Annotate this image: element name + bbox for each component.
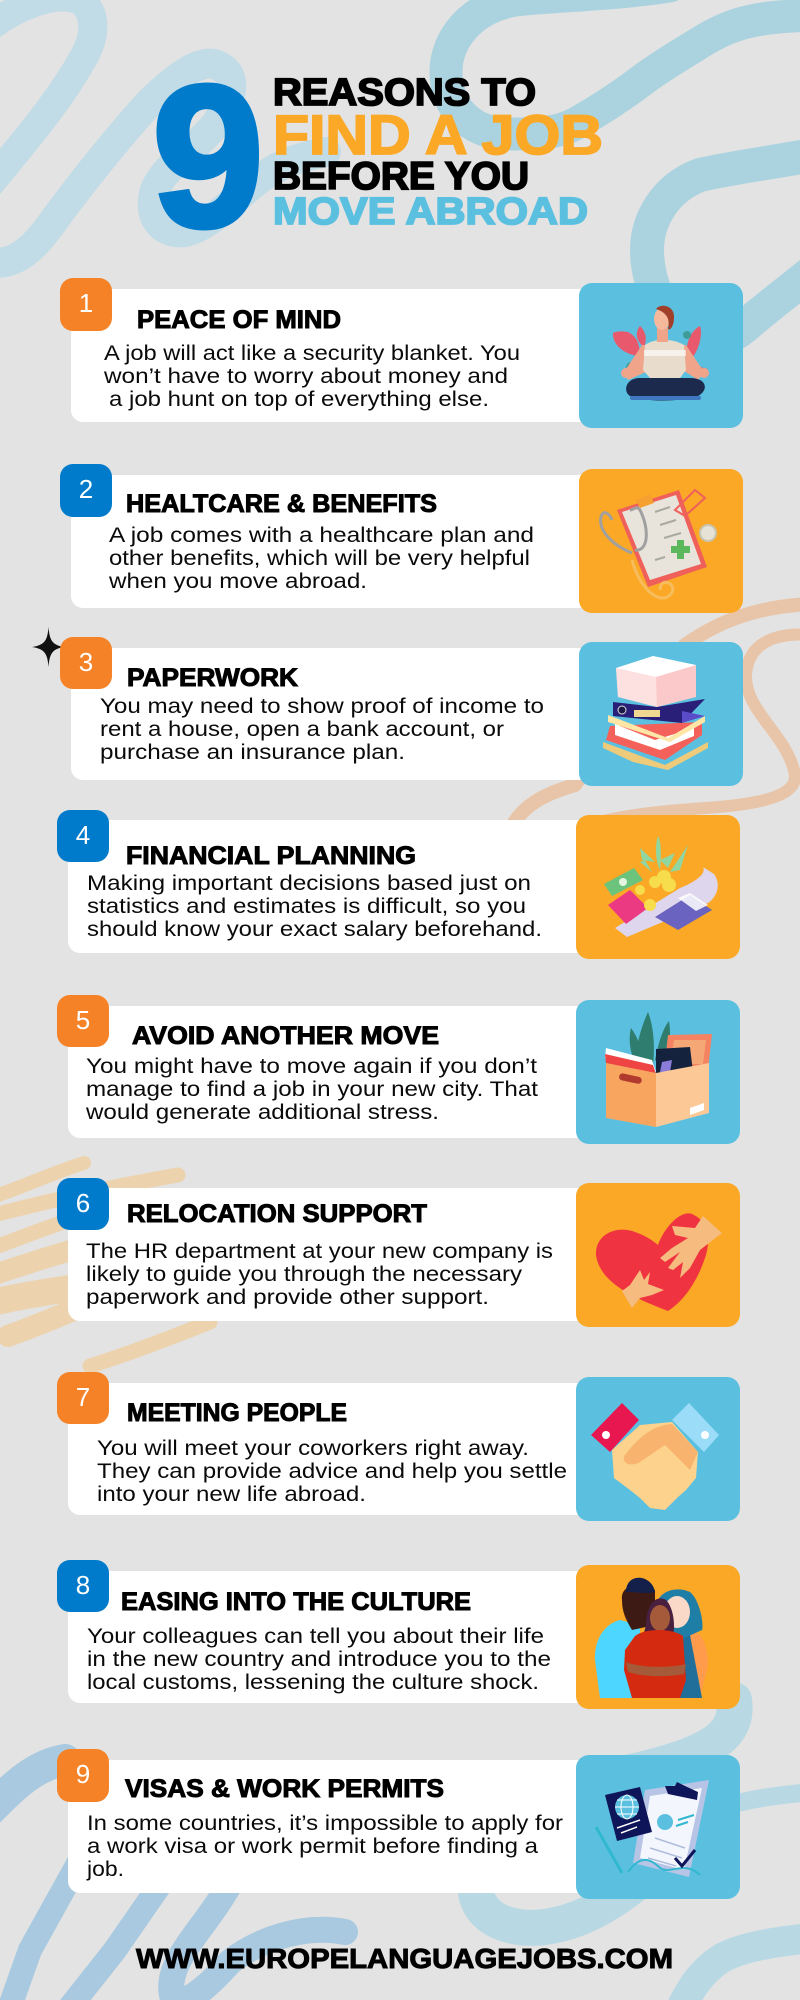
panel: reason 1 peace of mind [60,278,743,428]
badge 6: 6 [76,1188,90,1218]
badge 1 [60,278,112,331]
panel: reason 7 meeting people [57,1372,740,1521]
body text 9: job. [86,1858,124,1881]
body text 7: into your new life abroad. [97,1483,366,1506]
heading 9: VISAS & WORK PERMITS [125,1775,444,1803]
body text 8: Your colleagues can tell you about their life [87,1625,544,1648]
heading 4: FINANCIAL PLANNING [126,842,416,870]
badge 2: 2 [79,474,93,504]
body text 5: manage to find a job in your new city. That [86,1078,538,1101]
image tile 6: hands holding heart [576,1183,740,1327]
footer website url: WWW.EUROPELANGUAGEJOBS.COM [136,1943,673,1974]
body text 8: local customs, lessening the culture shock. [87,1671,539,1694]
body text 7 [97,1437,567,1506]
image tile 2: clipboard and stethoscope [579,469,743,613]
badge 2 [60,464,112,517]
badge 4 [57,810,109,862]
body text 4: statistics and estimates is difficult, so you [87,895,526,918]
badge 7: 7 [76,1382,90,1412]
body text 6 [86,1240,553,1309]
image tile 4: money and calculator [576,815,740,959]
body text 6: likely to guide you through the necessary [86,1263,523,1286]
body text 7: They can provide advice and help you settle [97,1460,567,1483]
body text 3: You may need to show proof of income to [100,695,544,718]
heading 5: AVOID ANOTHER MOVE [132,1022,439,1050]
body text 2: when you move abroad. [108,570,367,593]
image tile 1: meditating man [579,283,743,428]
heading 2: HEALTCARE & BENEFITS [126,490,437,518]
body text 4: should know your exact salary beforehand. [87,918,542,941]
body text 5: would generate additional stress. [85,1101,439,1124]
title [152,43,603,269]
body text 6: paperwork and provide other support. [86,1286,489,1309]
title line: find a job: FIND A JOB [273,103,603,166]
badge 5: 5 [76,1005,90,1035]
body text 1 [103,342,520,411]
badge 5 [57,995,109,1047]
image tile 5: cardboard box with plant [576,1000,740,1144]
body text 5 [85,1055,538,1124]
image tile 9: passport and clipboard [576,1755,740,1899]
heading 1: PEACE OF MIND [137,306,341,334]
badge 3 [60,637,112,689]
body text 7: You will meet your coworkers right away. [97,1437,529,1460]
big number 9: 9 [152,43,264,269]
body text 2: other benefits, which will be very helpful [109,547,530,570]
body text 8 [87,1625,551,1694]
image tile 8: group of three friends [576,1565,740,1709]
title line: before you: BEFORE YOU [273,155,529,198]
heading 6: RELOCATION SUPPORT [127,1200,427,1228]
icon: black sparkle star [32,627,64,667]
body text 1: a job hunt on top of everything else. [109,388,489,411]
body text 9: In some countries, it’s impossible to apply for [87,1812,563,1835]
body text 4: Making important decisions based just on [87,872,531,895]
panel: reason 8 easing into the culture [57,1560,740,1709]
panel: reason 2 healthcare [60,464,743,613]
body text 2 [108,524,534,593]
panel: reason 6 relocation support [57,1178,740,1327]
body text 2: A job comes with a healthcare plan and [109,524,534,547]
badge 7 [57,1372,109,1424]
title line: move abroad: MOVE ABROAD [273,191,588,233]
body text 4 [87,872,542,941]
badge 9: 9 [76,1759,90,1789]
body text 3 [100,695,544,764]
panel: reason 3 paperwork [32,627,743,786]
body text 9 [86,1812,563,1881]
body text 6: The HR department at your new company is [86,1240,553,1263]
badge 6 [57,1178,109,1230]
body text 1: A job will act like a security blanket. You [104,342,520,365]
heading 3: PAPERWORK [127,664,298,692]
body text 9: a work visa or work permit before finding a [87,1835,538,1858]
heading 7: MEETING PEOPLE [127,1399,347,1427]
title line: reasons to: REASONS TO [273,72,536,114]
badge 8 [57,1560,109,1612]
body text 5: You might have to move again if you don’t [86,1055,537,1078]
badge 1: 1 [79,288,93,318]
panel: reason 5 avoid another move [57,995,740,1144]
badge 8: 8 [76,1570,90,1600]
body text 1: won’t have to worry about money and [103,365,508,388]
body text 8: in the new country and introduce you to the [87,1648,551,1671]
badge 3: 3 [79,647,93,677]
heading 8: EASING INTO THE CULTURE [121,1588,471,1616]
image tile 7: handshake [576,1377,740,1521]
body text 3: purchase an insurance plan. [100,741,405,764]
badge 9 [57,1749,109,1802]
badge 4: 4 [76,820,90,850]
panel: reason 9 visas and work permits [57,1749,740,1899]
panel: reason 4 financial planning [57,810,740,959]
body text 3: rent a house, open a bank account, or [100,718,504,741]
image tile 3: stack of papers and binders [579,642,743,786]
